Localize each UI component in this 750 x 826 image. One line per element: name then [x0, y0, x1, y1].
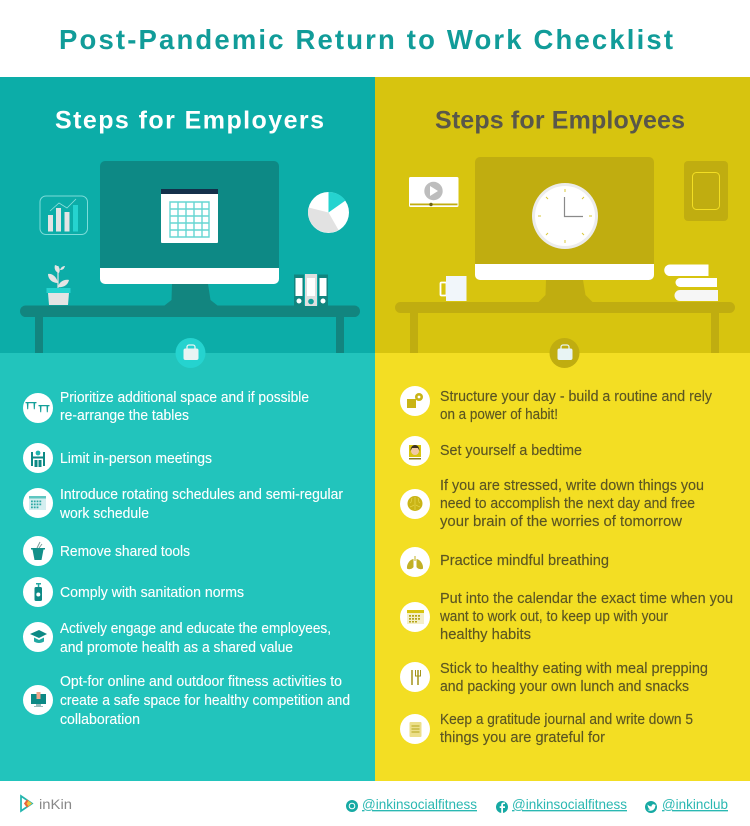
- heading: steps for employees: Steps for Employees: [435, 106, 685, 134]
- item: breathing: [400, 547, 609, 577]
- item: online fitness: Opt-for online and outdoor fitness activities to: [60, 674, 342, 690]
- item: stress: your brain of the worries of tomorrow: [440, 514, 682, 530]
- item: tools: [23, 536, 190, 566]
- icon: plant: [46, 265, 70, 305]
- item: sanitation: Comply with sanitation norms: [60, 585, 244, 601]
- item: routine: [400, 386, 713, 423]
- icon: binders: [294, 274, 328, 306]
- item: stress: [400, 478, 704, 530]
- item: breathing: Practice mindful breathing: [440, 553, 609, 569]
- item: workout calendar: want to work out, to keep up with your: [439, 609, 668, 625]
- item: healthy eating: and packing your own lunch and snacks: [440, 679, 689, 695]
- item: schedules: Introduce rotating schedules and semi-regular: [60, 487, 343, 503]
- icon: video player: [409, 177, 458, 207]
- panel: employee steps: [375, 338, 750, 781]
- monitor: [475, 157, 654, 280]
- item: education: [23, 621, 331, 656]
- item: sanitation: [23, 577, 244, 607]
- panel: employers illustration: [0, 77, 375, 353]
- logo: inKin: [21, 796, 72, 812]
- item: online fitness: [23, 674, 350, 728]
- icon: calendar: [161, 189, 218, 243]
- icon: clock: [532, 183, 598, 249]
- item: healthy eating: Stick to healthy eating with meal prepping: [440, 661, 708, 677]
- panel: employer steps: [0, 338, 375, 781]
- desk: [20, 284, 360, 353]
- icon: pie chart: [308, 192, 349, 233]
- item: space: [23, 390, 309, 424]
- panel: employees illustration: [375, 77, 750, 353]
- icon: briefcase badge: [176, 338, 206, 368]
- item: workout calendar: Put into the calendar the exact time when you: [440, 591, 733, 607]
- item: stress: If you are stressed, write down things you: [440, 478, 704, 494]
- item: tools: Remove shared tools: [60, 544, 190, 560]
- icon: books: [664, 264, 718, 301]
- icon: wall frame: [684, 161, 728, 221]
- social: twitter: @inkinclub: [662, 797, 728, 812]
- item: space: re-arrange the tables: [60, 408, 189, 424]
- item: online fitness: collaboration: [60, 712, 140, 728]
- social: facebook: @inkinsocialfitness: [512, 797, 627, 812]
- item: schedules: work schedule: [59, 506, 149, 522]
- item: gratitude journal: [400, 712, 693, 746]
- item: bedtime: Set yourself a bedtime: [440, 443, 582, 459]
- item: meetings: Limit in-person meetings: [60, 451, 212, 467]
- item: gratitude journal: Keep a gratitude journal and write down 5: [440, 712, 693, 728]
- logo: inKin: inKin: [39, 796, 72, 812]
- title: Post-Pandemic Return to Work Checklist: [59, 24, 673, 55]
- desk: [395, 280, 735, 353]
- item: online fitness: create a safe space for healthy competition and: [60, 693, 350, 709]
- item: routine: on a power of habit!: [440, 407, 558, 423]
- item: routine: Structure your day - build a routine and rely: [440, 389, 713, 405]
- item: education: and promote health as a shared value: [60, 640, 293, 656]
- item: education: Actively engage and educate the employees,: [60, 621, 331, 637]
- item: workout calendar: healthy habits: [440, 627, 531, 643]
- monitor: [100, 161, 279, 284]
- icon: bar chart: [40, 196, 88, 234]
- heading: steps for employers: Steps for Employers: [55, 106, 324, 134]
- item: bedtime: [400, 436, 582, 466]
- item: meetings: [23, 443, 212, 473]
- item: workout calendar: [400, 591, 733, 643]
- item: stress: need to accomplish the next day and free: [440, 496, 695, 512]
- item: healthy eating: [400, 661, 708, 695]
- social: instagram: @inkinsocialfitness: [362, 797, 477, 812]
- icon: briefcase badge: [550, 338, 580, 368]
- item: gratitude journal: things you are grateful for: [440, 730, 605, 746]
- item: schedules: [23, 487, 343, 522]
- icon: mug: [440, 276, 466, 301]
- item: space: Prioritize additional space and if possible: [60, 390, 309, 406]
